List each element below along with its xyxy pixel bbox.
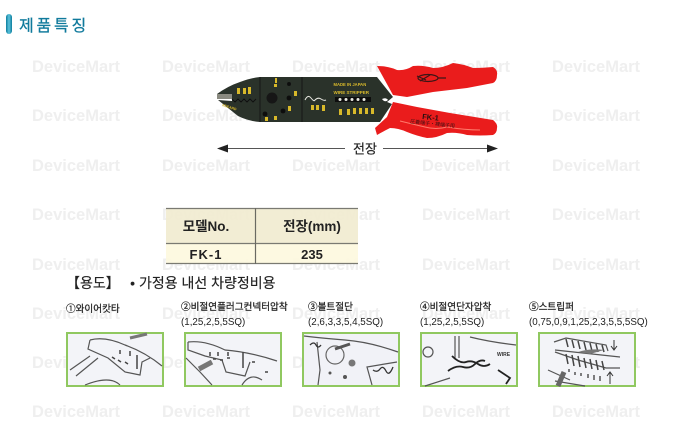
watermark pattern: DeviceMart: [552, 58, 641, 76]
watermark pattern: DeviceMart: [32, 305, 121, 323]
watermark pattern: DeviceMart: [162, 206, 251, 224]
spec table: 전장(mm): [283, 219, 341, 234]
table header: 모델No.: [183, 219, 229, 234]
yellow markings on plier: KEEARD: [222, 103, 237, 112]
watermark pattern: DeviceMart: [32, 403, 121, 421]
plier head: [217, 77, 393, 122]
yellow markings on plier: WIRE STRIPPER: [334, 90, 370, 95]
watermark pattern: DeviceMart: [292, 403, 381, 421]
watermark pattern: DeviceMart: [422, 305, 511, 323]
watermark pattern: DeviceMart: [162, 403, 251, 421]
watermark pattern: DeviceMart: [292, 256, 381, 274]
watermark pattern: DeviceMart: [552, 403, 641, 421]
function 3: bolt cutting: ③볼트절단: [308, 301, 353, 313]
watermark pattern: DeviceMart: [422, 256, 511, 274]
function 1: wire cutter: ①와이어캇타: [66, 303, 120, 315]
handle logo: [417, 74, 446, 82]
watermark pattern: DeviceMart: [552, 157, 641, 175]
jaw details: [217, 94, 232, 99]
watermark pattern: DeviceMart: [162, 157, 251, 175]
function 5: stripper: ⑤스트립퍼: [529, 301, 574, 313]
function 3: bolt cutting: [303, 301, 399, 386]
watermark pattern: DeviceMart: [162, 305, 251, 323]
watermark pattern: DeviceMart: [32, 157, 121, 175]
watermark pattern: DeviceMart: [422, 403, 511, 421]
dimension arrow: 전장: 전장: [353, 141, 377, 156]
spec table: 235: [301, 247, 323, 262]
yellow markings on plier: [222, 78, 374, 121]
section heading: 제품특징: [6, 14, 89, 35]
model mark FK-1: FK-1: [422, 112, 439, 123]
watermark pattern: DeviceMart: [292, 354, 381, 372]
watermark pattern: [32, 58, 641, 421]
table row: FK-1: [190, 247, 222, 262]
watermark pattern: DeviceMart: [292, 107, 381, 125]
function 5: stripper: [529, 301, 648, 386]
function 2: plug connector crimp: (1,25,2,5,5SQ): [181, 317, 245, 328]
watermark pattern: DeviceMart: [32, 58, 121, 76]
watermark pattern: DeviceMart: [32, 354, 121, 372]
section heading: 제품특징: 제품특징: [19, 17, 89, 35]
function 2: plug connector crimp: [181, 301, 288, 386]
function 2: plug connector crimp: ②비절연플러그컨넥터압착: [181, 301, 288, 313]
watermark pattern: DeviceMart: [552, 107, 641, 125]
watermark pattern: DeviceMart: [32, 107, 121, 125]
function 4: insulated terminal crimp: ④비절연단자압착: [420, 301, 492, 313]
watermark pattern: DeviceMart: [162, 354, 251, 372]
watermark pattern: DeviceMart: [552, 354, 641, 372]
dimension arrow: 전장: [217, 141, 498, 156]
watermark pattern: DeviceMart: [552, 256, 641, 274]
watermark pattern: DeviceMart: [292, 58, 381, 76]
watermark pattern: DeviceMart: [162, 256, 251, 274]
function 1: wire cutter: [66, 303, 163, 386]
watermark pattern: DeviceMart: [422, 157, 511, 175]
watermark pattern: DeviceMart: [292, 305, 381, 323]
watermark pattern: DeviceMart: [292, 157, 381, 175]
upper red handle: [377, 63, 497, 97]
function 4: insulated terminal crimp: WIRE: [497, 352, 511, 358]
function 4: insulated terminal crimp: [420, 301, 517, 386]
function 5: stripper: (0,75,0,9,1,25,2,3,5,5,5SQ): [529, 317, 648, 328]
usage text: 【용도】 • 가정용 내선 차량정비용: [66, 275, 276, 291]
watermark pattern: DeviceMart: [422, 354, 511, 372]
function 4: insulated terminal crimp: (1,25,2,5,5SQ): [420, 317, 484, 328]
watermark pattern: DeviceMart: [32, 256, 121, 274]
function 3: bolt cutting: (2,6,3,3,5,4,5SQ): [308, 317, 383, 328]
watermark pattern: DeviceMart: [32, 206, 121, 224]
spec table: [166, 208, 358, 264]
watermark pattern: DeviceMart: [422, 206, 511, 224]
watermark pattern: DeviceMart: [292, 206, 381, 224]
watermark pattern: DeviceMart: [552, 305, 641, 323]
watermark pattern: DeviceMart: [162, 58, 251, 76]
watermark pattern: DeviceMart: [422, 58, 511, 76]
yellow markings on plier: MADE IN JAPAN: [334, 82, 366, 87]
watermark pattern: DeviceMart: [422, 107, 511, 125]
watermark pattern: DeviceMart: [552, 206, 641, 224]
lower red handle: [375, 102, 497, 138]
product photo: crimping pliers: [217, 63, 497, 138]
product photo: crimping pliers: 圧着端子・裸端子用: [410, 118, 455, 130]
watermark pattern: DeviceMart: [162, 107, 251, 125]
